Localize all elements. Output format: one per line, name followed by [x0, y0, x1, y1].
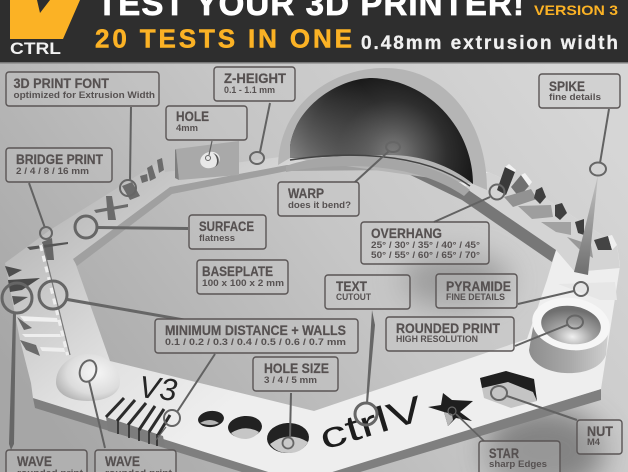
- cylinder: [529, 293, 613, 373]
- label: wave right: WAVE: [105, 454, 140, 469]
- label: 3D print font: [6, 72, 159, 196]
- label: 3D print font: optimized for Extrusion Width: [14, 90, 155, 101]
- star cutout: [428, 393, 473, 426]
- inner opening: [75, 165, 556, 411]
- subtitle: extrusion width: 0.48mm extrusion width: [361, 33, 618, 54]
- label: surface: flatness: [199, 233, 235, 244]
- plate front faces: [33, 389, 601, 472]
- label: overhang: [361, 184, 504, 264]
- subtitle: 20 tests in one: 20 TESTS IN ONE: [95, 24, 352, 54]
- label: hole size: HOLE SIZE: [264, 361, 329, 376]
- spike: [574, 175, 598, 275]
- sphere: [56, 354, 120, 401]
- label: z-height: [214, 67, 295, 164]
- label: pyramide: FINE DETAILS: [446, 292, 505, 303]
- label: star: sharp Edges: [489, 459, 547, 470]
- label: bridge print: BRIDGE PRINT: [16, 152, 104, 167]
- label: text cutout: CUTOUT: [336, 292, 371, 303]
- label: text cutout: [325, 275, 410, 425]
- round holes: [197, 410, 310, 454]
- plate top surface: [5, 157, 620, 472]
- pyramid pad: [558, 282, 617, 300]
- label: overhang: OVERHANG: [371, 226, 442, 241]
- label: 3D print font: 3D PRINT FONT: [14, 76, 110, 91]
- label: overhang: 25° / 30° / 35° / 40° / 45°: [371, 240, 480, 251]
- label: spike: [539, 74, 620, 176]
- label: rounded print: ROUNDED PRINT: [396, 321, 501, 336]
- label: minimum distance + walls: [39, 281, 358, 440]
- label: star: STAR: [489, 446, 519, 461]
- label: nut: [491, 386, 622, 454]
- label: z-height: Z-HEIGHT: [224, 71, 287, 86]
- icon: ctrlV logo: CTRL: [10, 39, 61, 58]
- label: wave right: [77, 358, 176, 472]
- label: nut: NUT: [587, 424, 614, 439]
- label: text cutout: TEXT: [336, 279, 368, 294]
- hole block: [175, 141, 239, 180]
- label: baseplate: 100 x 100 x 2 mm: [202, 278, 284, 289]
- label: baseplate: [197, 260, 288, 294]
- label: surface: [75, 215, 266, 249]
- wave ramps: [5, 266, 65, 356]
- label: warp: does it bend?: [288, 200, 351, 211]
- label: rounded print: [386, 316, 583, 351]
- label: hole size: [253, 357, 338, 448]
- label: hole size: 3 / 4 / 5 mm: [264, 375, 317, 386]
- label: spike: fine details: [549, 92, 601, 103]
- label: bridge print: [6, 148, 112, 239]
- version tag: VERSION 3: [534, 2, 618, 18]
- label: spike: SPIKE: [549, 79, 585, 94]
- label: wave left: WAVE: [17, 454, 52, 469]
- label: hole: 4mm: [176, 123, 198, 134]
- label: overhang: 50° / 55° / 60° / 65° / 70°: [371, 250, 480, 261]
- inner walls: [73, 165, 400, 266]
- bridge print: [41, 245, 68, 355]
- label: warp: WARP: [288, 186, 324, 201]
- label: pyramide: [436, 274, 588, 308]
- label: hole: HOLE: [176, 109, 209, 124]
- label: star: [448, 407, 560, 472]
- header bar: [0, 0, 628, 64]
- label: baseplate: BASEPLATE: [202, 264, 273, 279]
- dome overhang: [278, 68, 487, 196]
- label: surface: SURFACE: [199, 219, 254, 234]
- label: minimum distance + walls: 0.1 / 0.2 / 0.3 / 0.4 / 0.5 / 0.6 / 0.7 mm: [165, 337, 346, 348]
- label: minimum distance + walls: MINIMUM DISTANCE + WALLS: [165, 323, 346, 338]
- icon: ctrlV logo: [10, 0, 80, 58]
- wall comb: [106, 398, 170, 447]
- label: pyramide: PYRAMIDE: [446, 279, 511, 294]
- label: bridge print: 2 / 4 / 8 / 16 mm: [16, 166, 89, 177]
- label: hole: [166, 106, 247, 160]
- nut cutout: [480, 371, 537, 408]
- label: nut: M4: [587, 437, 601, 448]
- overhang test: [497, 164, 617, 258]
- V3 engraving: V3: [137, 369, 179, 408]
- font test letters: [94, 158, 164, 220]
- upper right band tone: [464, 172, 620, 272]
- label: warp: [278, 142, 400, 216]
- label: z-height: 0.1 - 1.1 mm: [224, 85, 275, 96]
- label: wave left: [2, 283, 87, 472]
- ctrlV cutout text: ctrlV: [314, 387, 428, 458]
- label: rounded print: HIGH RESOLUTION: [396, 334, 478, 345]
